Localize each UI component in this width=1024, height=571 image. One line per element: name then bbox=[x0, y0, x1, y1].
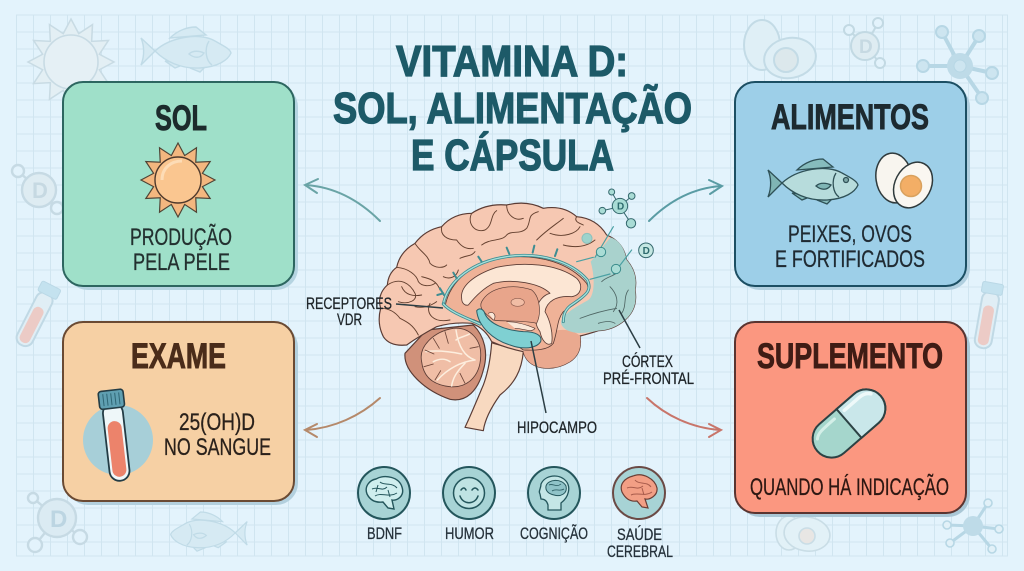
label: hipocampo: HIPOCAMPO bbox=[517, 418, 597, 437]
panel: sol bbox=[63, 82, 298, 290]
title: E CÁPSULA bbox=[411, 130, 614, 180]
icon: saúde cerebral bbox=[613, 467, 665, 519]
title: SOL, ALIMENTAÇÃO bbox=[333, 83, 692, 133]
inner limbic region bbox=[445, 257, 588, 350]
watermark: vitamin D bottom left bbox=[28, 493, 87, 552]
arrow: to exame bbox=[305, 398, 380, 437]
text: 25(OH)D no sangue: 25(OH)D bbox=[179, 409, 255, 436]
icon: blood tube bbox=[83, 389, 153, 482]
watermark: vitamin D top right bbox=[844, 18, 885, 68]
icon: capsule bbox=[805, 382, 893, 465]
panel: suplemento bbox=[735, 322, 970, 517]
icon: fish bbox=[768, 159, 858, 204]
watermark: vitamin D left: D bbox=[32, 178, 48, 203]
watermark: fish top bbox=[141, 27, 231, 72]
icon: cognição bbox=[528, 467, 580, 519]
icon: eggs bbox=[873, 151, 940, 215]
panel: alimentos bbox=[735, 82, 970, 290]
watermark: vitamin D top right: D bbox=[859, 37, 873, 58]
label: hipocampo bbox=[517, 341, 597, 437]
vitamin D molecules: D bbox=[617, 202, 624, 213]
watermark: fish bottom bbox=[171, 512, 247, 551]
heading: suplemento: SUPLEMENTO bbox=[757, 337, 943, 376]
temporal lobe bbox=[523, 330, 580, 368]
heading: sol: SOL bbox=[155, 99, 207, 138]
vitamin D molecules bbox=[582, 189, 653, 274]
hippocampus bbox=[477, 309, 541, 348]
watermark: tube right bbox=[972, 281, 1004, 350]
watermark: tube left bbox=[12, 281, 61, 350]
icon: humor bbox=[443, 467, 495, 519]
heading: exame: EXAME bbox=[131, 337, 226, 376]
prefrontal folds bbox=[580, 272, 628, 323]
brain illustration bbox=[379, 189, 653, 431]
label: cognição: COGNIÇÃO bbox=[520, 523, 588, 543]
label: córtex pré-frontal: CÓRTEX bbox=[622, 352, 673, 371]
cerebrum bbox=[379, 203, 636, 368]
cingulate pathway bbox=[437, 227, 632, 324]
text: produção pela pele bbox=[130, 224, 232, 276]
cerebellum bbox=[405, 325, 486, 400]
prefrontal cortex bbox=[561, 237, 636, 333]
label: receptores VDR bbox=[306, 294, 443, 329]
watermark: vitamin D bottom left: D bbox=[50, 506, 67, 533]
label: córtex pré-frontal: PRÉ-FRONTAL bbox=[603, 369, 694, 388]
icon: sun bbox=[141, 143, 215, 217]
watermark: molecule top right bbox=[917, 26, 998, 104]
arrow: to alimentos bbox=[649, 180, 722, 221]
watermark: vitamin D left bbox=[12, 165, 63, 214]
text: peixes, ovos e fortificados bbox=[775, 221, 925, 273]
label: saúde cerebral: CEREBRAL bbox=[607, 543, 673, 561]
label: receptores VDR: RECEPTORES bbox=[306, 294, 392, 313]
icon: bdnf bbox=[358, 467, 410, 519]
text: produção pela pele: PRODUÇÃO bbox=[130, 224, 232, 251]
icon row bbox=[358, 467, 673, 561]
title bbox=[333, 37, 692, 180]
label: saúde cerebral: SAÚDE bbox=[617, 525, 662, 544]
label: saúde cerebral bbox=[607, 525, 673, 561]
label: receptores VDR: VDR bbox=[337, 310, 362, 329]
vitamin D molecules: D bbox=[643, 246, 650, 257]
text: produção pela pele: PELA PELE bbox=[133, 249, 230, 276]
text: 25(OH)D no sangue bbox=[164, 409, 271, 461]
watermark: molecule bottom right bbox=[943, 499, 1003, 553]
thalamus bbox=[481, 287, 539, 331]
label: humor: HUMOR bbox=[445, 525, 494, 543]
text: peixes, ovos e fortificados: E FORTIFICADOS bbox=[775, 246, 925, 273]
corpus callosum bbox=[462, 264, 581, 344]
brainstem bbox=[465, 343, 523, 431]
title: VITAMINA D: bbox=[396, 37, 628, 86]
arrow: to sol bbox=[305, 179, 380, 221]
text: 25(OH)D no sangue: NO SANGUE bbox=[164, 434, 271, 461]
label: córtex pré-frontal bbox=[603, 310, 694, 388]
watermark: eggs bottom bbox=[776, 514, 832, 554]
panel: exame bbox=[63, 322, 298, 505]
watermark: sun bbox=[28, 19, 114, 105]
watermark: eggs top bbox=[744, 20, 819, 82]
text: peixes, ovos e fortificados: PEIXES, OVOS bbox=[788, 221, 912, 248]
label: bdnf: BDNF bbox=[367, 525, 402, 543]
cortical folds bbox=[381, 205, 595, 335]
heading: alimentos: ALIMENTOS bbox=[771, 98, 929, 137]
arrow: to suplemento bbox=[647, 398, 721, 437]
